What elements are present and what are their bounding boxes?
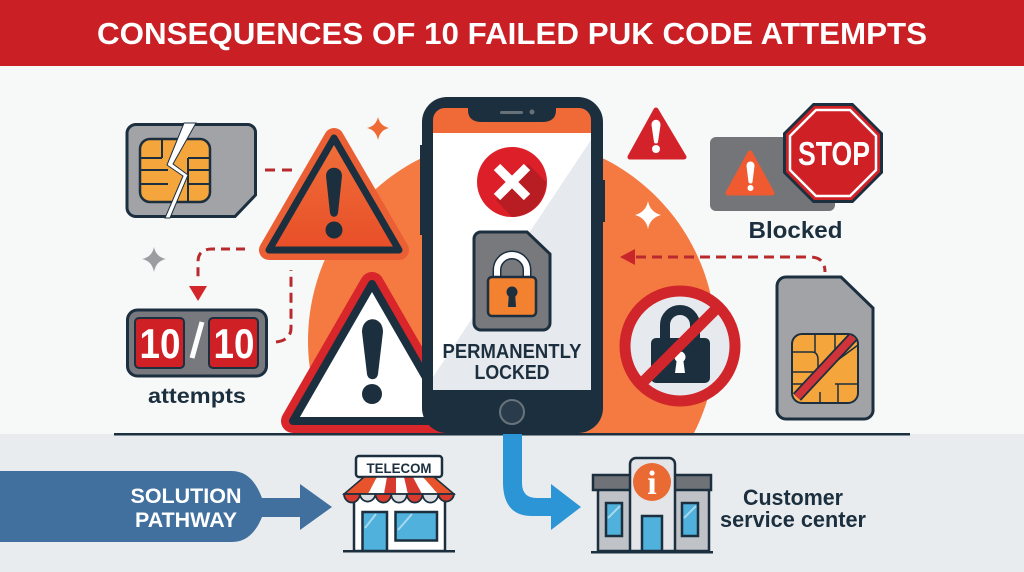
label: customer service center [720,485,866,532]
solution pathway arrow [0,471,332,542]
solution pathway arrow: PATHWAY [135,509,237,532]
icon: broken SIM card [127,123,256,218]
solution pathway arrow: SOLUTION [130,485,242,508]
orange background circle [308,137,716,433]
counter: 10 / 10 attempts [128,310,266,408]
label: customer service center: Customer [743,485,843,510]
baseline divider [114,433,910,436]
label: attempts: attempts [148,385,246,408]
title banner: CONSEQUENCES OF 10 FAILED PUK CODE ATTEMPTS [97,16,927,51]
icon: warning on gray card [728,153,772,193]
icon: customer service center [591,458,713,554]
connector: SIM to phone arrow [620,249,825,272]
blocked group: stop sign [710,103,883,243]
icon: red X circle [477,147,547,217]
icon: small red warning triangle [630,110,684,157]
icon: customer service center: i [647,465,657,502]
label: permanently locked: LOCKED [474,362,550,384]
icon: sparkle white [635,201,661,229]
connector: warning to attempts [189,249,245,301]
connector: SIM to warning [265,168,294,172]
home button [500,400,524,424]
icon: sparkle orange [367,117,389,140]
label: customer service center: service center [720,507,866,532]
label: permanently locked: PERMANENTLY [442,341,582,363]
icon: stop sign [783,103,883,203]
icon: disabled SIM card [777,277,873,419]
blue arrow to service center [503,434,581,530]
label: permanently locked [442,341,582,384]
counter: 10 / 10 attempts: 10 [214,320,254,367]
connector: attempts to warning [276,270,291,342]
icon: sparkle gray [142,247,166,272]
icon: stop sign: STOP [798,135,870,172]
icon: orange warning triangle [269,138,399,250]
phone [420,97,605,433]
title banner [0,0,1024,66]
icon: telecom store [343,456,455,552]
icon: prohibited padlock [625,291,735,401]
icon: large white warning triangle [293,284,451,421]
counter: 10 / 10 attempts: 10 [140,320,180,367]
screen [433,133,591,390]
label: blocked: Blocked [748,217,842,243]
icon: SIM with padlock [474,232,550,330]
icon: telecom store: TELECOM [366,460,432,476]
